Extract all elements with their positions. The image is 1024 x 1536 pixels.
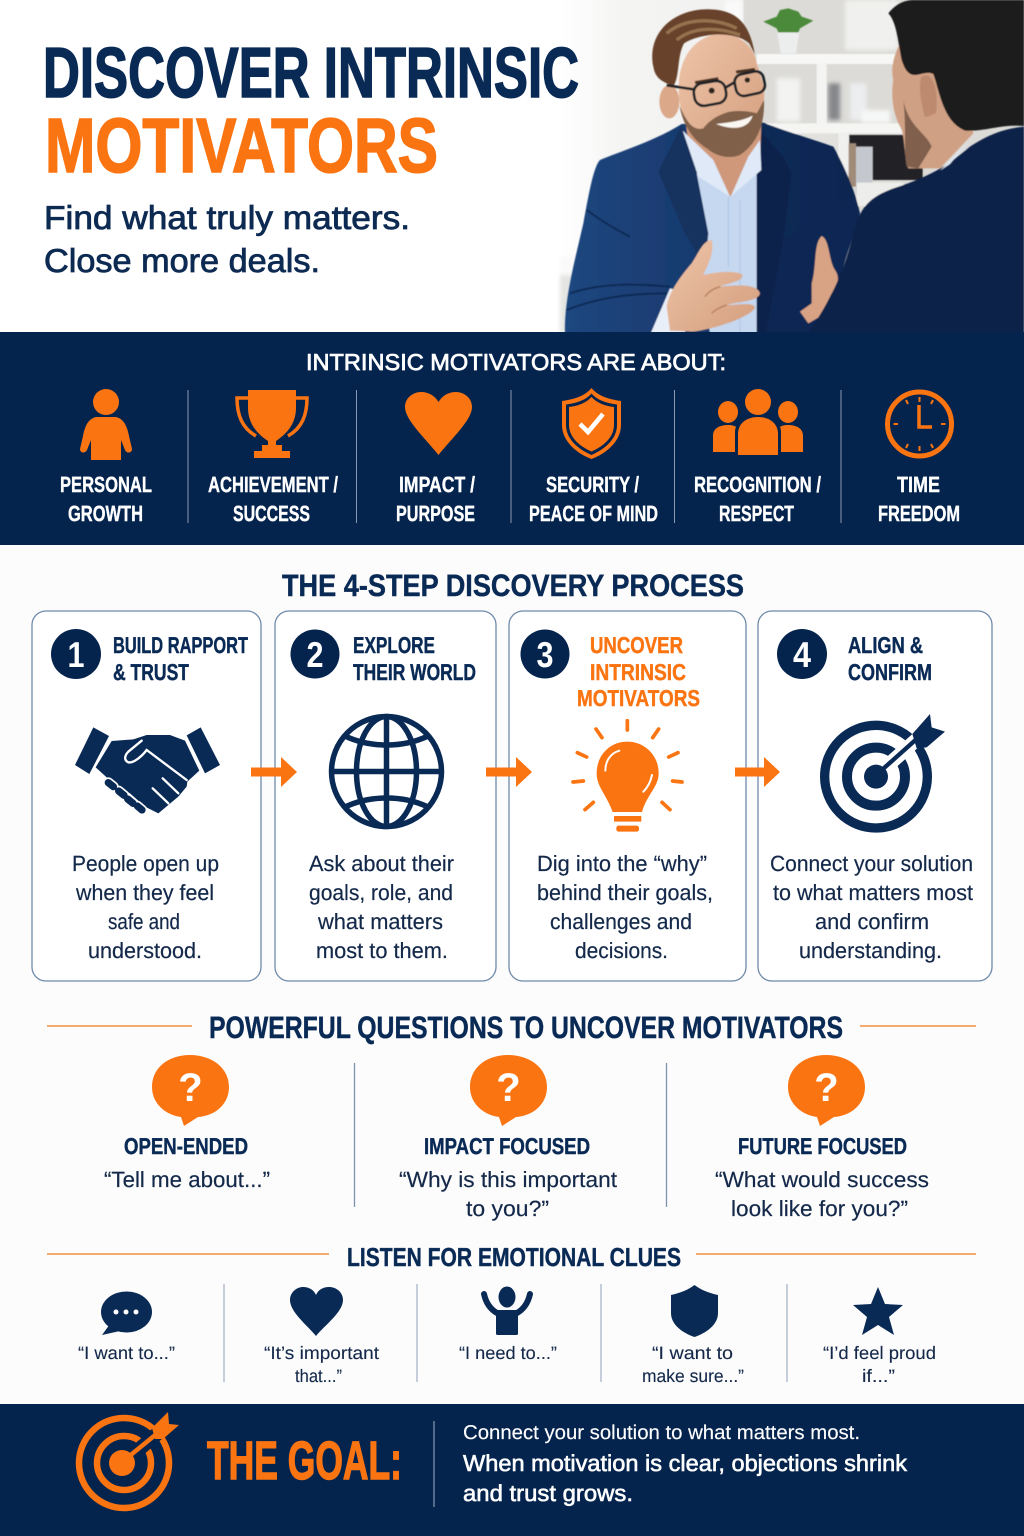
- label: recognition: [694, 472, 821, 526]
- hand gesture right: [800, 236, 838, 323]
- clue: I'd feel proud: [823, 1287, 936, 1386]
- step number 4: 4: [793, 634, 811, 675]
- step 3 description: behind their goals,: [537, 880, 713, 905]
- clue: it's important: [264, 1287, 379, 1386]
- label: time freedom: FREEDOM: [878, 501, 960, 526]
- label: achievement: ACHIEVEMENT /: [208, 472, 338, 497]
- label: security: [529, 472, 658, 526]
- title: [43, 34, 579, 189]
- icon: question bubble: [788, 1055, 865, 1126]
- clue: it's important: that...”: [295, 1366, 342, 1386]
- step number 2: [290, 630, 340, 678]
- panel: step 2: [275, 611, 496, 981]
- title: DISCOVER INTRINSIC: [43, 34, 579, 113]
- question: open-ended: “Tell me about...”: [104, 1167, 270, 1192]
- question: future focused: [715, 1055, 929, 1221]
- step number 3: 3: [536, 634, 554, 675]
- hero panel: [0, 0, 1024, 333]
- label: impact: IMPACT /: [399, 472, 475, 497]
- subtitle: [44, 199, 410, 279]
- clue: I want to: [78, 1292, 175, 1363]
- band heading: INTRINSIC MOTIVATORS ARE ABOUT:: [306, 349, 726, 375]
- icon: personal growth: [80, 389, 132, 460]
- label: personal growth: [60, 472, 152, 526]
- clue: it's important: “It’s important: [264, 1343, 379, 1363]
- question: impact focused: “Why is this important: [399, 1167, 617, 1192]
- photo: two businessmen in conversation: [560, 0, 1024, 333]
- icon: clock: [888, 392, 952, 456]
- step number 1: 1: [68, 634, 84, 675]
- label: time freedom: TIME: [897, 472, 940, 497]
- heading: listen for emotional clues: LISTEN FOR EMOTIONAL CLUES: [347, 1242, 681, 1272]
- icon: light bulb: [573, 721, 682, 832]
- arrow: step 2 to 3: [486, 757, 532, 787]
- clue: I want to make sure: [642, 1285, 744, 1386]
- question: future focused: FUTURE FOCUSED: [738, 1133, 907, 1159]
- step 1 heading: [113, 632, 248, 685]
- icon: question bubble: ?: [496, 1066, 521, 1110]
- step 4 description: [770, 851, 973, 963]
- panel: step 1: [32, 611, 261, 981]
- step 3 description: [537, 851, 713, 963]
- step 1 description: safe and: [108, 909, 180, 934]
- icon: recognition group: [713, 389, 803, 455]
- man facing viewer: [565, 9, 860, 333]
- step number 1: [51, 629, 101, 679]
- clue: I want to make sure: make sure...”: [642, 1366, 744, 1386]
- step 2 description: [309, 851, 454, 963]
- label: impact: [396, 472, 475, 526]
- clue: I want to make sure: “I want to: [652, 1343, 733, 1363]
- step 3 heading: UNCOVER: [590, 632, 683, 658]
- step 1 heading: BUILD RAPPORT: [113, 632, 248, 658]
- step 3 description: Dig into the “why”: [537, 851, 707, 876]
- step 3 heading: INTRINSIC: [590, 659, 686, 685]
- clue: I need to: “I need to...”: [459, 1343, 557, 1363]
- step 2 description: Ask about their: [309, 851, 454, 876]
- step 4 description: Connect your solution: [770, 851, 973, 876]
- icon: question bubble: [152, 1055, 229, 1126]
- goal text: and trust grows.: [463, 1480, 633, 1506]
- hand gesture left: [667, 240, 760, 332]
- icon: shield: [671, 1285, 718, 1337]
- icon: globe: [332, 716, 442, 826]
- step 4 heading: CONFIRM: [848, 659, 932, 685]
- step 2 description: goals, role, and: [309, 880, 453, 905]
- step 1 heading: & TRUST: [113, 659, 189, 685]
- question: impact focused: IMPACT FOCUSED: [424, 1133, 590, 1159]
- question: future focused: look like for you?”: [731, 1196, 908, 1221]
- step 2 description: most to them.: [316, 938, 448, 963]
- clue: I'd feel proud: “I’d feel proud: [823, 1343, 936, 1363]
- icon: trophy: [237, 390, 307, 458]
- step 4 heading: [848, 632, 932, 685]
- icon: star: [853, 1287, 903, 1335]
- label: impact: PURPOSE: [396, 501, 475, 526]
- label: personal growth: PERSONAL: [60, 472, 152, 497]
- goal text: [463, 1422, 907, 1506]
- step 2 description: what matters: [317, 909, 443, 934]
- step number 3: [520, 630, 570, 678]
- question: impact focused: [399, 1055, 617, 1221]
- question: open-ended: [104, 1055, 270, 1192]
- step 2 heading: THEIR WORLD: [353, 659, 476, 685]
- step number 2: 2: [306, 634, 324, 675]
- step 4 description: understanding.: [799, 938, 942, 963]
- label: recognition: RESPECT: [719, 501, 794, 526]
- question: impact focused: to you?”: [466, 1196, 549, 1221]
- goal text: Connect your solution to what matters most.: [463, 1422, 860, 1444]
- label: achievement: [208, 472, 338, 526]
- step 4 description: and confirm: [815, 909, 929, 934]
- step 4 heading: ALIGN &: [848, 632, 923, 658]
- icon: goal target: [79, 1412, 179, 1508]
- panel: intrinsic motivators band: [0, 332, 1024, 545]
- icon: handshake: [75, 727, 220, 813]
- label: time freedom: [878, 472, 960, 526]
- step 2 heading: EXPLORE: [353, 632, 435, 658]
- plant on shelf: [763, 8, 813, 53]
- panel: step 3: [509, 611, 746, 981]
- subtitle: Close more deals.: [44, 242, 320, 279]
- step 1 description: understood.: [88, 938, 202, 963]
- title: MOTIVATORS: [45, 103, 438, 189]
- icon: question bubble: ?: [178, 1066, 203, 1110]
- goal label: THE GOAL:: [207, 1431, 402, 1491]
- panel: the goal footer: [0, 1404, 1024, 1536]
- label: personal growth: GROWTH: [68, 501, 143, 526]
- icon: question bubble: ?: [814, 1066, 839, 1110]
- arrow: step 3 to 4: [735, 757, 780, 787]
- label: security: SECURITY /: [546, 472, 639, 497]
- step 3 description: challenges and: [550, 909, 692, 934]
- man seen from behind: [808, 0, 1024, 333]
- step 3 heading: MOTIVATORS: [577, 685, 700, 711]
- heading: powerful questions: POWERFUL QUESTIONS TO UNCOVER MOTIVATORS: [209, 1010, 843, 1045]
- label: recognition: RECOGNITION /: [694, 472, 821, 497]
- icon: target with arrow: [825, 714, 945, 828]
- heading: 4-step discovery process: THE 4-STEP DISCOVERY PROCESS: [282, 568, 744, 603]
- step 2 heading: [353, 632, 476, 685]
- icon: heart: [405, 392, 472, 455]
- clue: I'd feel proud: if...”: [862, 1366, 895, 1386]
- step 3 description: decisions.: [575, 938, 668, 963]
- panel: step 4: [758, 611, 992, 981]
- step 1 description: when they feel: [75, 880, 214, 905]
- goal text: When motivation is clear, objections shrink: [463, 1450, 907, 1476]
- icon: security shield: [562, 388, 621, 459]
- question: future focused: “What would success: [715, 1167, 929, 1192]
- arrow: step 1 to 2: [251, 757, 297, 787]
- icon: question bubble: [470, 1055, 547, 1126]
- step 3 heading: [577, 632, 700, 711]
- step number 4: [777, 629, 827, 679]
- icon: chat bubble: [101, 1292, 152, 1335]
- clue: I want to: “I want to...”: [78, 1343, 175, 1363]
- question: open-ended: OPEN-ENDED: [124, 1133, 248, 1159]
- step 1 description: People open up: [72, 851, 219, 876]
- icon: person with raised arms: [484, 1286, 530, 1335]
- clue: I need to: [459, 1286, 557, 1363]
- icon: heart: [290, 1287, 343, 1336]
- step 1 description: [72, 851, 219, 963]
- label: achievement: SUCCESS: [233, 501, 310, 526]
- subtitle: Find what truly matters.: [44, 199, 410, 236]
- step 4 description: to what matters most: [773, 880, 973, 905]
- label: security: PEACE OF MIND: [529, 501, 658, 526]
